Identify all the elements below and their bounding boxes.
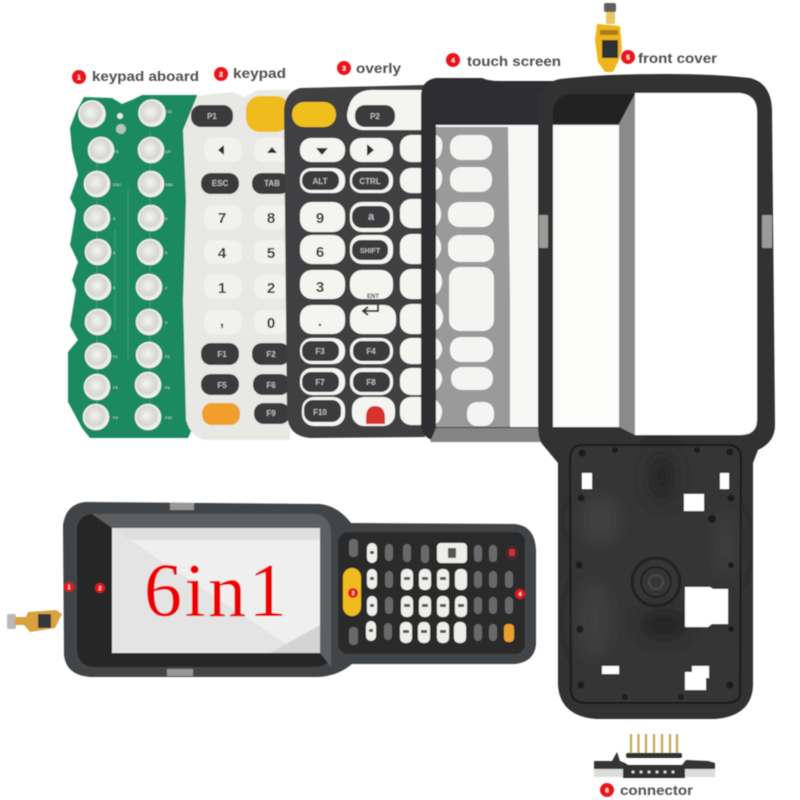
dark keys bbox=[191, 105, 290, 424]
touch screen glass bbox=[436, 125, 560, 427]
overlay legends: F4 bbox=[366, 347, 376, 356]
keypad legends: 0 bbox=[267, 315, 275, 332]
cover left window bbox=[553, 125, 619, 427]
dark overlay keys bbox=[302, 105, 395, 422]
silkscreen labels: 6 bbox=[113, 250, 116, 255]
contact pads bbox=[79, 100, 165, 430]
device key legends bbox=[369, 548, 464, 633]
label: touch screen: touch screen bbox=[467, 53, 561, 69]
silkscreen labels: 0 bbox=[165, 320, 168, 325]
label: connector: connector bbox=[620, 782, 694, 798]
panel: touch screen bbox=[421, 78, 560, 442]
flex cable bbox=[7, 610, 62, 632]
label: keypad: 2 bbox=[219, 72, 223, 78]
silkscreen labels: F10 bbox=[165, 415, 173, 420]
yellow key bbox=[246, 96, 290, 132]
panel: keypad (silicone) bbox=[183, 90, 290, 440]
panel: front cover bbox=[538, 74, 775, 719]
silkscreen labels: 8 bbox=[165, 216, 168, 221]
silkscreen labels: 2 bbox=[165, 285, 168, 290]
label: overly bbox=[337, 60, 401, 76]
silkscreen labels: F5 bbox=[113, 385, 118, 390]
keypad legends: , bbox=[220, 313, 224, 330]
title: 6in1: 6in1 bbox=[144, 549, 289, 633]
keypad legends: P1 bbox=[207, 112, 217, 121]
overlay legends: . bbox=[318, 313, 322, 330]
keypad legends: 8 bbox=[267, 210, 275, 227]
label: front cover: 5 bbox=[626, 54, 630, 62]
keypad legends: F1 bbox=[217, 350, 227, 359]
see-through key windows bbox=[436, 135, 494, 426]
label: keypad bbox=[214, 65, 286, 81]
orange key bbox=[202, 403, 240, 425]
label: overly: 3 bbox=[342, 66, 346, 72]
icon: flex cable of front cover bbox=[595, 3, 622, 72]
icon: red power key bbox=[366, 406, 385, 424]
overlay legends: a bbox=[368, 211, 375, 223]
screen bezel bbox=[77, 514, 331, 667]
device body bbox=[63, 502, 536, 677]
overlay legends: 9 bbox=[316, 210, 324, 227]
silkscreen labels: F2 bbox=[165, 354, 170, 359]
panel: keypad aboard (green PCB) bbox=[68, 95, 197, 438]
silkscreen labels: F1 bbox=[113, 354, 118, 359]
white key windows bbox=[300, 90, 430, 426]
label: keypad aboard: 1 bbox=[77, 74, 81, 82]
overlay legends: 6 bbox=[316, 244, 324, 261]
keypad legends: 5 bbox=[267, 245, 275, 262]
silkscreen labels bbox=[113, 109, 173, 420]
keypad legends bbox=[207, 112, 280, 418]
silkscreen labels: 3 bbox=[113, 285, 116, 290]
overlay legends: F10 bbox=[313, 408, 327, 417]
numbered markers on device: 3 bbox=[352, 591, 355, 597]
icon: small mounting holes bbox=[116, 113, 126, 134]
keypad legends: 1 bbox=[218, 280, 226, 297]
device keys white bbox=[366, 543, 467, 643]
numbered markers on device: 2 bbox=[99, 586, 102, 592]
panel: overlay bbox=[284, 85, 430, 438]
keypad legends: F5 bbox=[217, 381, 227, 390]
silkscreen labels: ESC bbox=[113, 182, 121, 187]
silkscreen labels: UP bbox=[165, 149, 171, 154]
keypad legends: ESC bbox=[212, 179, 228, 188]
keypad legends: TAB bbox=[264, 179, 280, 188]
connector pins bbox=[631, 734, 677, 753]
overlay legends: ALT bbox=[313, 177, 328, 186]
keypad legends: F2 bbox=[266, 350, 276, 359]
label: connector: 6 bbox=[605, 788, 609, 794]
overlay legends: CTRL bbox=[359, 177, 381, 186]
cover dark top corner bbox=[553, 94, 635, 123]
label: front cover: front cover bbox=[638, 50, 718, 66]
device keys grey bbox=[349, 539, 513, 645]
numbered markers on device: 1 bbox=[68, 585, 71, 591]
silkscreen labels: . bbox=[113, 320, 114, 325]
side clips bbox=[539, 215, 772, 248]
silkscreen labels: F9 bbox=[113, 415, 118, 420]
screw posts bbox=[576, 447, 734, 700]
device keys colored bbox=[343, 546, 518, 642]
overlay legends: 3 bbox=[316, 279, 324, 296]
label: keypad: keypad bbox=[233, 65, 286, 81]
icon: speaker boss bbox=[632, 558, 680, 606]
overlay legends bbox=[313, 112, 385, 424]
silkscreen labels: 5 bbox=[165, 250, 168, 255]
silkscreen labels: 9 bbox=[113, 216, 116, 221]
silkscreen labels: F6 bbox=[165, 385, 170, 390]
cover right window bbox=[635, 93, 757, 435]
keypad legends: F6 bbox=[266, 381, 276, 390]
keypad deck bbox=[338, 532, 525, 654]
keypad legends: 7 bbox=[218, 210, 226, 227]
overlay legends: SHIFT bbox=[360, 248, 381, 255]
keypad legends: 4 bbox=[218, 245, 227, 262]
numbered markers on device bbox=[64, 582, 525, 599]
rear housing interior bbox=[570, 445, 741, 703]
label: touch screen: 4 bbox=[451, 58, 455, 64]
label: keypad aboard: keypad aboard bbox=[92, 68, 199, 84]
label: overly: overly bbox=[356, 60, 401, 76]
overlay legends: F7 bbox=[315, 378, 325, 387]
housing cut-outs bbox=[582, 473, 729, 690]
silkscreen labels: P1 bbox=[114, 149, 120, 154]
yellow overlay key bbox=[292, 102, 336, 127]
silkscreen labels: F12 bbox=[165, 109, 173, 114]
touch screen lower bezel bbox=[430, 428, 560, 442]
keypad legends: 2 bbox=[267, 280, 275, 297]
overlay legends: F8 bbox=[366, 378, 376, 387]
overlay legends: ENT bbox=[367, 294, 379, 300]
screen bbox=[112, 528, 320, 653]
panel: connector bbox=[594, 734, 715, 778]
overlay legends: P2 bbox=[370, 112, 380, 121]
silkscreen labels: TAB bbox=[165, 182, 173, 187]
cover bevel bbox=[619, 94, 635, 435]
overlay legends: F3 bbox=[315, 347, 325, 356]
side clips bbox=[167, 503, 194, 676]
numbered markers on device: 4 bbox=[519, 592, 522, 598]
keypad legends: F9 bbox=[266, 409, 276, 418]
panel: assembled device bbox=[7, 502, 536, 677]
